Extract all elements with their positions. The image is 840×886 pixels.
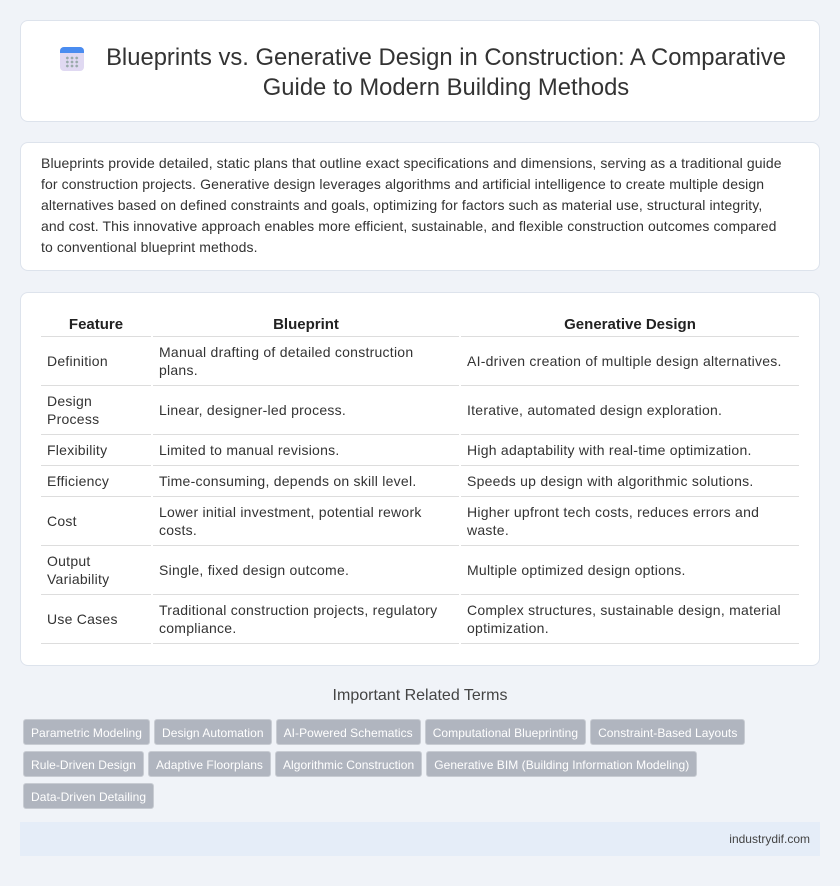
related terms heading: Important Related Terms (333, 687, 507, 704)
comparison table: Lower initial investment, potential rework costs. (159, 504, 422, 538)
related terms tags (23, 719, 745, 809)
related terms tags: Algorithmic Construction (283, 758, 414, 772)
intro text: alternatives based on defined constraints and goals, optimizing for factors such as material use, structural integrity, (41, 197, 762, 213)
comparison table: Speeds up design with algorithmic solutions. (467, 473, 754, 489)
comparison table: Output Variability (47, 553, 109, 587)
comparison table: Manual drafting of detailed construction plans. (159, 344, 413, 378)
comparison table: Generative Design (564, 316, 696, 333)
footer: industrydif.com (729, 832, 810, 846)
title: Blueprints vs. Generative Design in Construction: A Comparative Guide to Modern Building Methods (106, 44, 786, 101)
comparison table: Blueprint (273, 316, 339, 333)
intro text: and cost. This innovative approach enables more efficient, sustainable, and flexible construction outcomes compared (41, 218, 777, 234)
comparison table: Limited to manual revisions. (159, 442, 340, 458)
related terms tags: AI-Powered Schematics (284, 726, 413, 740)
comparison table (20, 292, 820, 666)
comparison table: Design Process (47, 393, 99, 427)
related terms tags: Generative BIM (Building Information Modeling) (434, 758, 689, 772)
related terms tags: Data-Driven Detailing (31, 790, 146, 804)
related terms tags: Adaptive Floorplans (156, 758, 263, 772)
related terms tags: Design Automation (162, 726, 264, 740)
comparison table: High adaptability with real-time optimization. (467, 442, 752, 458)
related terms tags: Rule-Driven Design (31, 758, 136, 772)
comparison table: AI-driven creation of multiple design alternatives. (467, 353, 782, 369)
comparison table: Use Cases (47, 611, 118, 627)
related terms tags: Computational Blueprinting (433, 726, 578, 740)
intro text (20, 142, 820, 271)
comparison table: Time-consuming, depends on skill level. (159, 473, 416, 489)
related terms tags: Constraint-Based Layouts (598, 726, 737, 740)
comparison table: Linear, designer-led process. (159, 402, 346, 418)
comparison table: Cost (47, 513, 77, 529)
comparison table: Feature (69, 316, 123, 333)
footer (20, 822, 820, 856)
header card (20, 20, 820, 122)
comparison table: Multiple optimized design options. (467, 562, 686, 578)
icon: calendar grid (60, 47, 84, 71)
comparison table: Iterative, automated design exploration. (467, 402, 722, 418)
intro text: for construction projects. Generative design leverages algorithms and artificial intelligence to create multiple design (41, 176, 764, 192)
comparison table: Higher upfront tech costs, reduces errors and waste. (467, 504, 759, 538)
comparison table: Single, fixed design outcome. (159, 562, 349, 578)
related terms tags: Parametric Modeling (31, 726, 142, 740)
comparison table: Definition (47, 353, 108, 369)
intro text: Blueprints provide detailed, static plans that outline exact specifications and dimensions, serving as a traditional guide (41, 155, 782, 171)
comparison table: Flexibility (47, 442, 107, 458)
comparison table: Efficiency (47, 473, 109, 489)
comparison table: Complex structures, sustainable design, material optimization. (467, 602, 781, 636)
intro text: to conventional blueprint methods. (41, 239, 258, 255)
comparison table: Traditional construction projects, regulatory compliance. (159, 602, 437, 636)
